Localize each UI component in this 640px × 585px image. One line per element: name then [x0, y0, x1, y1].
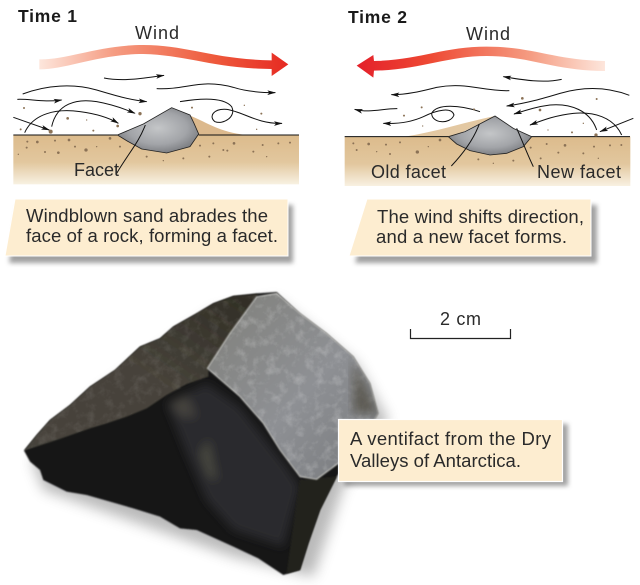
- facet leader lines: [451, 124, 533, 167]
- rock: [117, 108, 199, 153]
- rock drop shadow: [32, 300, 388, 577]
- label: facet: Facet: [74, 160, 119, 180]
- label: wind: Wind: [466, 24, 510, 44]
- callout: time 1: [5, 199, 293, 263]
- arrow: wind direction right: [39, 45, 288, 76]
- photo: ventifact rock: [24, 292, 388, 577]
- dark lower face highlights: [167, 383, 300, 547]
- panel: time 2: [345, 7, 633, 263]
- facet texture: [207, 292, 380, 480]
- gray polished facet: [207, 293, 378, 479]
- sand grains: [18, 105, 291, 161]
- label: old facet: Old facet: [371, 162, 446, 182]
- sand drift behind rock: [188, 115, 247, 135]
- rock: [448, 116, 532, 155]
- callout: ventifact: [338, 420, 568, 486]
- scale bar: 2 cm: [440, 309, 481, 329]
- callout: ventifact: A ventifact from the Dry: [350, 428, 552, 449]
- facet leader line: [117, 125, 145, 173]
- panel: time 1: [5, 6, 299, 263]
- upper brown face texture: [24, 294, 258, 451]
- scale bar: [410, 309, 510, 338]
- callout: time 1: face of a rock, forming a facet.: [26, 225, 278, 246]
- old sand drift: [405, 116, 495, 137]
- label: wind: Wind: [135, 23, 179, 43]
- ground line: [345, 135, 630, 138]
- rock body: [24, 292, 378, 575]
- callout: time 2: and a new facet forms.: [376, 226, 567, 247]
- wind flow arrows: [13, 75, 282, 133]
- wind flow arrows: [355, 77, 633, 135]
- sand grains: [352, 97, 622, 164]
- upper brown face: [24, 294, 258, 451]
- label: new facet: New facet: [537, 162, 621, 182]
- diagram: time 2 rock and sand: [345, 47, 633, 186]
- heading: time 1: Time 1: [18, 6, 77, 26]
- diagram: time 1 rock and sand: [13, 45, 299, 184]
- callout: ventifact: Valleys of Antarctica.: [350, 450, 521, 471]
- callout: time 2: The wind shifts direction,: [377, 206, 584, 227]
- sand ground: [345, 137, 630, 186]
- ground line: [13, 133, 299, 136]
- sand ground: [13, 135, 299, 184]
- heading: time 2: Time 2: [348, 7, 407, 27]
- brown side edge: [287, 477, 337, 573]
- arrow: wind direction left: [357, 47, 605, 78]
- callout: time 2: [349, 199, 597, 263]
- callout: time 1: Windblown sand abrades the: [26, 205, 268, 226]
